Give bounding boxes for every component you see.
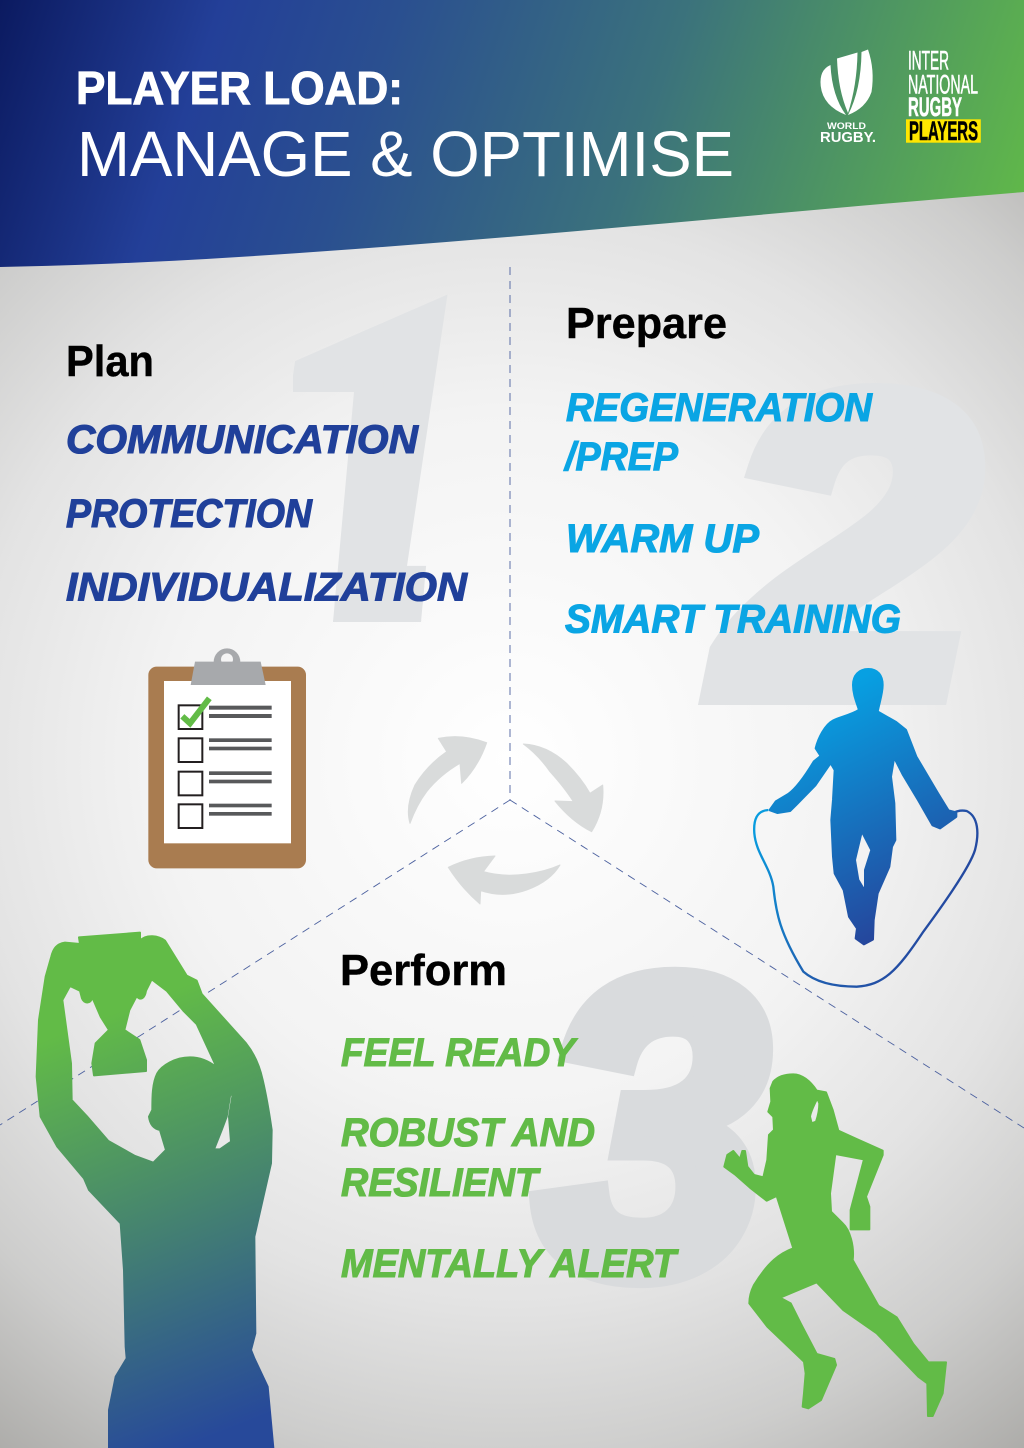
- large number 2: 2: [715, 308, 976, 782]
- prepare items: WARM UP: [566, 517, 759, 561]
- perform items: RESILIENT: [341, 1161, 541, 1205]
- icon: woman running: [724, 1074, 946, 1416]
- title: [76, 62, 734, 190]
- panel: plan: [66, 337, 468, 868]
- heading: Plan: Plan: [66, 337, 154, 386]
- large number 3: 3: [538, 893, 766, 1362]
- logo: World Rugby: WORLD: [827, 121, 867, 131]
- dashed section dividers: [0, 267, 1024, 1128]
- plan items: [66, 418, 468, 610]
- perform items: ROBUST AND: [341, 1111, 595, 1155]
- prepare items: /PREP: [563, 435, 678, 479]
- icon: player lifting trophy: [37, 933, 273, 1448]
- heading: Perform: Perform: [340, 946, 507, 995]
- plan items: INDIVIDUALIZATION: [66, 566, 468, 610]
- icon: clipboard checklist: [148, 648, 306, 868]
- arrow: perform to plan: [408, 737, 487, 823]
- arrow: prepare to perform: [448, 856, 560, 904]
- title: MANAGE & OPTIMISE: [77, 118, 734, 190]
- perform items: MENTALLY ALERT: [341, 1242, 679, 1286]
- plan items: PROTECTION: [66, 492, 313, 536]
- prepare items: SMART TRAINING: [565, 598, 901, 642]
- panel: prepare: [563, 299, 977, 987]
- perform items: [341, 1031, 679, 1286]
- icon: person skipping rope: [754, 669, 977, 987]
- prepare items: [563, 386, 901, 642]
- plan items: COMMUNICATION: [66, 418, 419, 462]
- arrow: plan to prepare: [523, 744, 603, 832]
- logo: World Rugby: [820, 50, 876, 146]
- perform items: FEEL READY: [341, 1031, 578, 1075]
- large number 1: 1: [262, 205, 466, 742]
- logo: International Rugby Players: RUGBY: [908, 92, 962, 122]
- logo: World Rugby: RUGBY.: [820, 129, 876, 146]
- logo: International Rugby Players: [906, 46, 981, 146]
- cycle arrows: [408, 737, 603, 904]
- panel: perform: [37, 933, 946, 1448]
- header banner: [0, 0, 1024, 267]
- title: PLAYER LOAD:: [76, 62, 403, 114]
- prepare items: REGENERATION: [566, 386, 873, 430]
- heading: Prepare: Prepare: [566, 299, 727, 348]
- logo: International Rugby Players: INTER: [908, 46, 949, 76]
